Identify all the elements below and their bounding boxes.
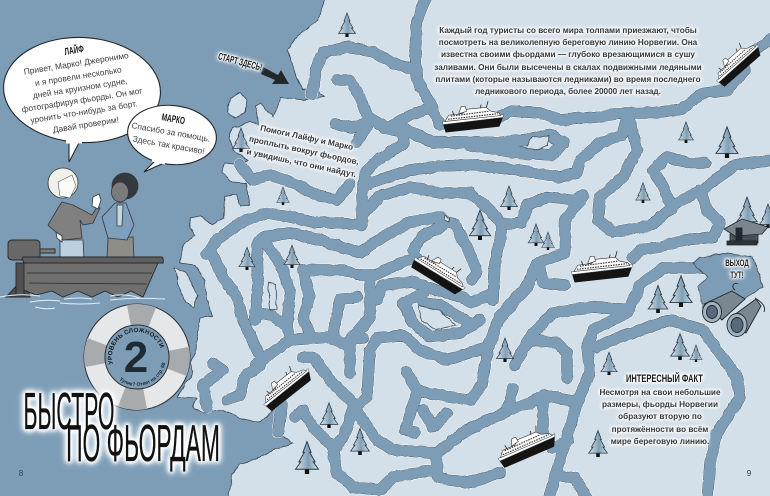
dialogue: Leif: фотографируя фьорды. Он мог bbox=[21, 86, 143, 115]
islands bbox=[175, 92, 549, 330]
fact text: протяжённости во всём bbox=[612, 425, 708, 434]
exit label: ВЫХОД bbox=[725, 258, 749, 269]
instruction text: проплыть вокруг фьордов, bbox=[248, 134, 360, 167]
fact heading: ИНТЕРЕСНЫЙ ФАКТ bbox=[626, 373, 703, 385]
title line 1: БЫСТРО bbox=[24, 383, 114, 441]
lifebuoy: Тупик? Ответ на стр. 68 bbox=[120, 362, 166, 386]
fact text: мире береговую линию. bbox=[611, 437, 709, 446]
lifebuoy bbox=[84, 304, 190, 410]
fact text: Несмотря на свои небольшие bbox=[599, 388, 721, 397]
dialogue: Leif: ЛАЙФ bbox=[64, 44, 85, 58]
fact text bbox=[597, 386, 722, 448]
exit label bbox=[722, 256, 752, 281]
dialogue: Leif: Привет, Марко! Джеронимо bbox=[23, 50, 129, 77]
dialogue: Marko: Здесь так красиво! bbox=[132, 133, 206, 156]
instruction text bbox=[242, 122, 360, 181]
fjord channels bbox=[203, 0, 770, 496]
dialogue: Marko bbox=[131, 112, 211, 156]
page number 8: 8 bbox=[19, 469, 23, 478]
start label: СТАРТ ЗДЕСЬ! bbox=[217, 51, 263, 74]
icon: cabin bbox=[724, 219, 768, 245]
character: Leif bbox=[48, 168, 101, 259]
exit bay bbox=[693, 253, 763, 307]
intro text: Каждый год туристы со всего мира толпами приезжают, чтобы bbox=[439, 26, 697, 35]
intro text: посмотреть на великолепную береговую линию Норвегии. Она bbox=[439, 38, 697, 47]
intro text: известна своими фьордами — глубоко врезающимися в сушу bbox=[441, 50, 695, 59]
dialogue: Leif: уронить что-нибудь за борт. bbox=[30, 99, 138, 126]
lifebuoy: 2 bbox=[124, 333, 148, 382]
dialogue: Leif: и я провели несколько bbox=[34, 64, 122, 88]
page number 9: 9 bbox=[747, 469, 751, 478]
intro text: плитами (которые называются ледниками) во время последнего bbox=[435, 75, 701, 84]
intro text bbox=[432, 24, 704, 98]
boat bbox=[6, 240, 163, 297]
exit label: ТУТ! bbox=[730, 270, 744, 281]
speech bubble: Leif bbox=[1, 33, 163, 162]
icon: start arrow bbox=[261, 67, 289, 84]
instruction text: и увидишь, что они найдут. bbox=[246, 147, 357, 179]
intro text: ледникового периода, более 20000 лет назад. bbox=[475, 87, 661, 96]
character: Marko bbox=[102, 173, 138, 259]
fact text: образуют вторую по bbox=[618, 412, 702, 421]
instruction text: Помоги Лайфу и Марко bbox=[259, 124, 354, 152]
dialogue: Marko: Спасибо за помощь. bbox=[131, 120, 211, 144]
speech bubble: Marko bbox=[125, 101, 219, 172]
lifebuoy: УРОВЕНЬ СЛОЖНОСТИ bbox=[108, 328, 164, 365]
trees bbox=[232, 13, 770, 474]
dialogue: Leif bbox=[21, 44, 143, 134]
dialogue: Leif: дней на круизном судне, bbox=[32, 75, 128, 100]
title line 2: ПО ФЬОРДАМ bbox=[66, 415, 220, 473]
intro text: заливами. Они были высечены в скалах подвижными ледяными bbox=[434, 63, 702, 72]
dialogue: Marko: МАРКО bbox=[161, 112, 186, 127]
fact text: размеры, фьорды Норвегии bbox=[602, 400, 718, 409]
icon: binoculars bbox=[702, 284, 765, 336]
dialogue: Leif: Давай проверим! bbox=[52, 114, 120, 134]
water ripples bbox=[0, 295, 165, 309]
ships bbox=[254, 35, 765, 469]
title bbox=[18, 383, 226, 477]
